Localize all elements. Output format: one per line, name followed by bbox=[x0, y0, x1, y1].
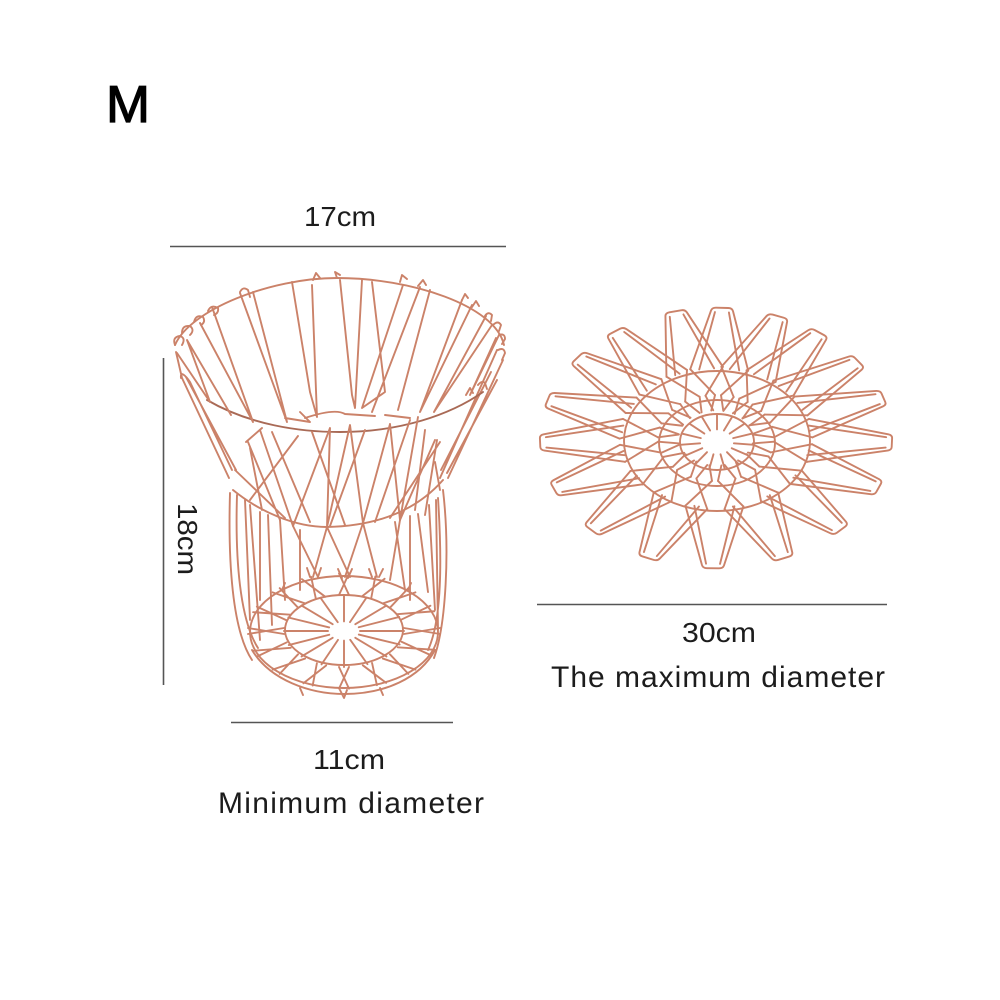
dimension: flat width 30cm: 30cm bbox=[682, 617, 756, 648]
title: size M: M bbox=[106, 76, 150, 134]
basket base rings bbox=[250, 576, 438, 688]
second ring bbox=[207, 392, 483, 432]
label: the maximum diameter: The maximum diameter bbox=[551, 661, 885, 694]
flat basket center spokes bbox=[680, 415, 754, 469]
rim hooks bbox=[174, 272, 505, 395]
middle wires, second to third ring bbox=[235, 417, 440, 527]
third ring bbox=[233, 480, 443, 527]
base spokes bbox=[248, 573, 440, 689]
dimension: height 18cm: 18cm bbox=[172, 503, 203, 575]
icon: rose gold wire basket, expanded bbox=[174, 272, 505, 698]
flared sides bbox=[176, 350, 503, 478]
dimension: bottom width 11cm: 11cm bbox=[313, 744, 385, 775]
basket top rim bbox=[175, 278, 504, 345]
label: minimum diameter: Minimum diameter bbox=[218, 787, 484, 820]
flat basket petals bbox=[539, 306, 893, 569]
dimension: top width 17cm: 17cm bbox=[304, 201, 376, 232]
icon: rose gold wire basket, flattened bbox=[539, 306, 893, 569]
lower body wires bbox=[230, 490, 446, 660]
upper wires, rim to second ring bbox=[177, 280, 499, 422]
flat basket rings bbox=[624, 371, 810, 511]
base hooks bbox=[282, 568, 411, 698]
